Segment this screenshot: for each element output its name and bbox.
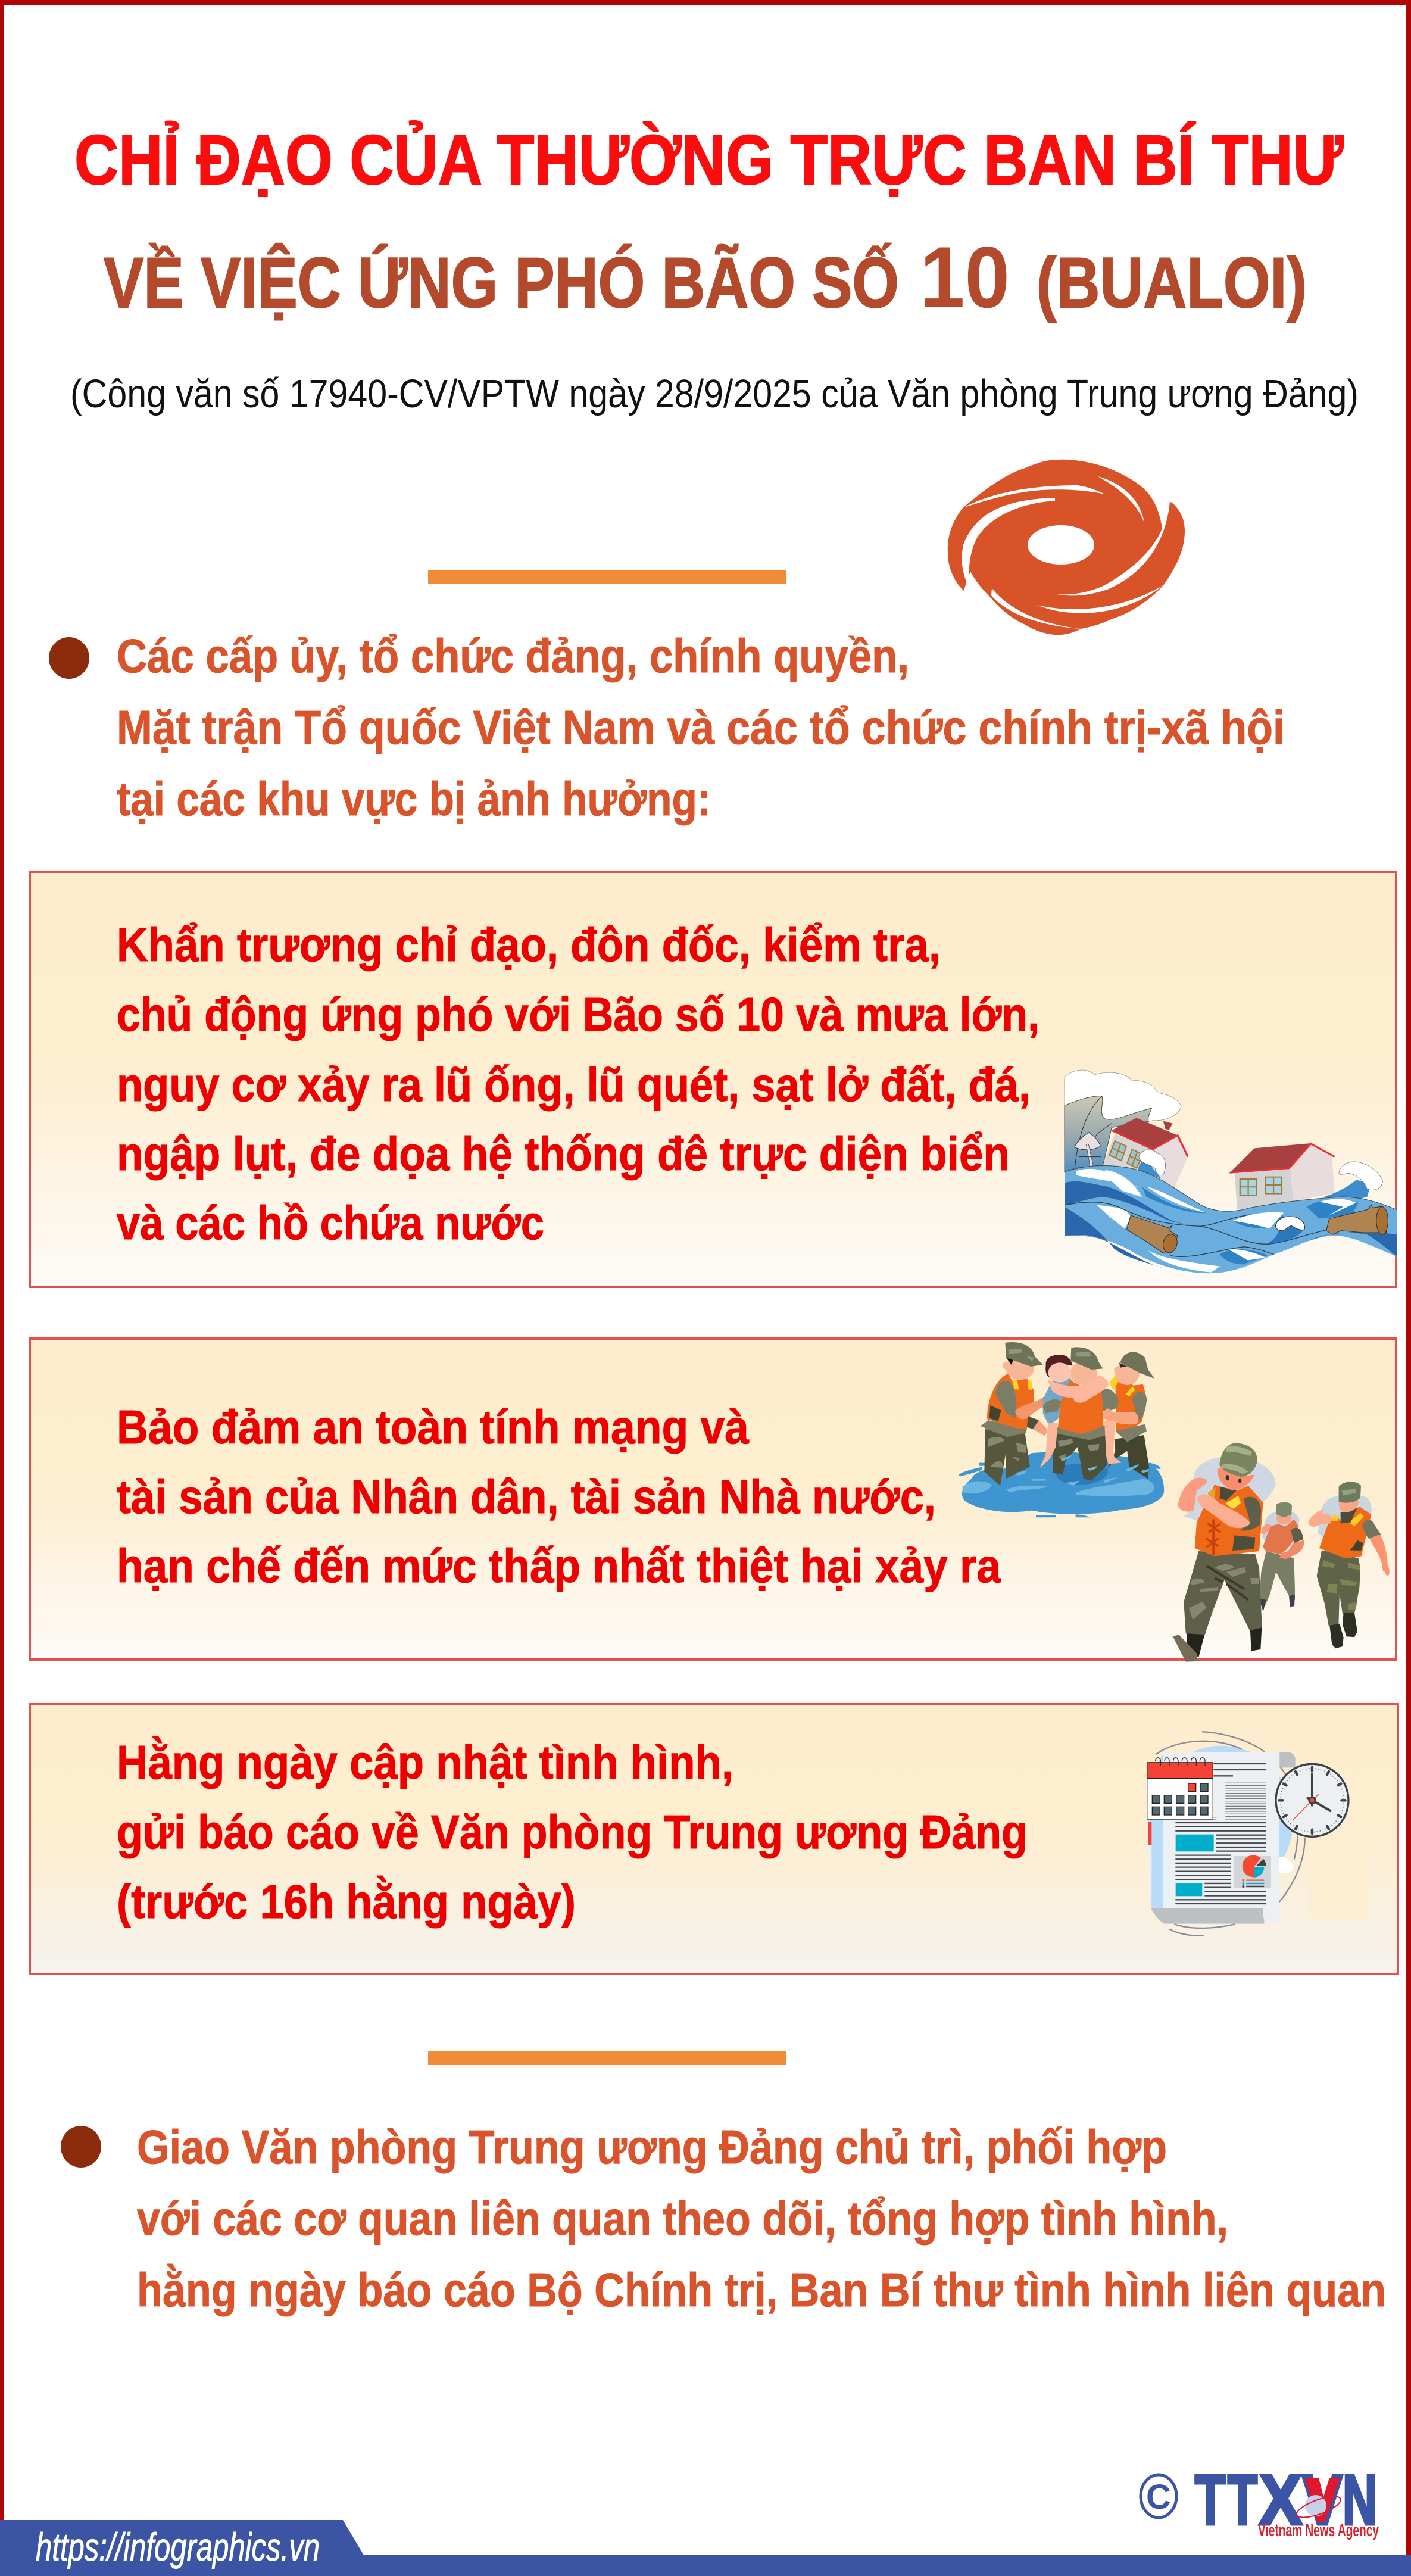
panel 1 text: Khẩn trương chỉ đạo, đôn đốc, kiểm tra,	[117, 918, 941, 971]
footer logo: TTXVN: X	[1259, 2460, 1302, 2540]
panel: box 3 background	[30, 1704, 1398, 1974]
divider bar 1	[428, 570, 786, 584]
footer band	[0, 2520, 1411, 2576]
child and soldier 2	[1043, 1377, 1073, 1423]
footer logo: TTXVN: V	[1302, 2460, 1343, 2540]
heading text	[117, 629, 1285, 825]
section 2 text	[137, 2120, 1386, 2316]
illustration: newspaper, calendar and clock	[1147, 1732, 1368, 1936]
right soldier	[1318, 1495, 1372, 1538]
section 2 text block	[61, 2120, 1386, 2316]
foreground splashes	[1016, 1455, 1149, 1476]
heading text: Các cấp ủy, tổ chức đảng, chính quyền,	[117, 629, 909, 682]
title line 2	[104, 229, 1307, 326]
panel 3 text: Hằng ngày cập nhật tình hình,	[117, 1736, 733, 1789]
panel 1 text: nguy cơ xảy ra lũ ống, lũ quét, sạt lở đất, đá,	[117, 1058, 1031, 1111]
title line 2: VỀ VIỆC ỨNG PHÓ BÃO SỐ	[104, 243, 899, 323]
divider bar 2	[428, 2051, 786, 2065]
section 2 text: Giao Văn phòng Trung ương Đảng chủ trì, phối hợp	[137, 2120, 1167, 2173]
title line 2: 10	[920, 229, 1010, 326]
illustration: flood and houses	[1065, 1070, 1397, 1273]
soldier 1	[984, 1429, 1030, 1486]
footer logo: TTXVN: T	[1195, 2460, 1226, 2540]
panel 1 text: chủ động ứng phó với Bão số 10 và mưa lớn,	[117, 988, 1039, 1041]
section 1 heading	[49, 629, 1285, 825]
panel 1 text	[117, 918, 1039, 1249]
panel: box 2 background	[30, 1339, 1396, 1660]
panel 2 text	[117, 1401, 1001, 1592]
footer url: https://infographics.vn	[36, 2525, 320, 2569]
panel 3 text: gửi báo cáo về Văn phòng Trung ương Đảng	[117, 1805, 1028, 1858]
heading text: tại các khu vực bị ảnh hưởng:	[117, 772, 711, 825]
footer logo: TTXVN: C	[1146, 2478, 1171, 2516]
front soldier	[1184, 1457, 1276, 1520]
panel 2 text: hạn chế đến mức thấp nhất thiệt hại xảy ra	[117, 1539, 1001, 1592]
footer logo: TTXVN: T	[1228, 2460, 1257, 2540]
panel 1 text: ngập lụt, đe dọa hệ thống đê trực diện biển	[117, 1127, 1010, 1180]
heading text: Mặt trận Tổ quốc Việt Nam và các tổ chức chính trị-xã hội	[117, 701, 1285, 754]
panel 3 text: (trước 16h hằng ngày)	[117, 1875, 576, 1928]
panel 2 text: Bảo đảm an toàn tính mạng và	[117, 1401, 749, 1454]
section 2 text: với các cơ quan liên quan theo dõi, tổng hợp tình hình,	[137, 2192, 1228, 2245]
bullet 1	[49, 637, 89, 679]
soldier 3	[1107, 1435, 1149, 1479]
icon: storm spiral	[948, 460, 1185, 635]
panel 3 text	[117, 1736, 1028, 1928]
back soldier	[1262, 1511, 1299, 1541]
footer logo: TTXVN: N	[1343, 2460, 1377, 2540]
footer logo: TTXVN	[1141, 2460, 1379, 2540]
illustration: soldiers rescuing a child in flood water	[959, 1342, 1164, 1517]
title line 2: (BUALOI)	[1037, 243, 1307, 323]
panel 1 text: và các hồ chứa nước	[117, 1196, 544, 1249]
panel: box 1 background	[30, 872, 1396, 1287]
bullet 2	[61, 2126, 101, 2168]
illustration: soldiers carrying sandbags	[1173, 1443, 1390, 1662]
panel 2 text: tài sản của Nhân dân, tài sản Nhà nước,	[117, 1470, 936, 1523]
